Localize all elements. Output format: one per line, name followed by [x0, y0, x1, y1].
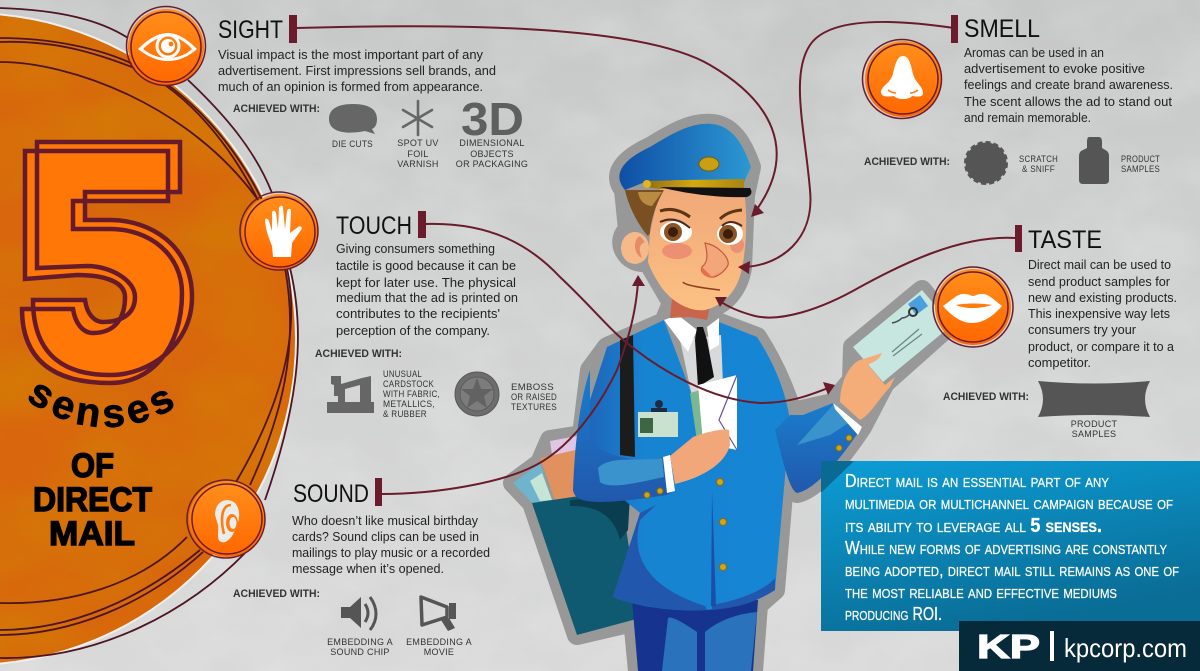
label: product samples: PRODUCT	[1121, 154, 1160, 164]
label: unusual cardstock: WITH FABRIC,	[383, 389, 440, 399]
panel: smell	[864, 15, 1173, 184]
title: of direct mail	[33, 447, 152, 553]
label: scratch and sniff: SCRATCH	[1019, 154, 1058, 164]
body text: new and existing products.	[1028, 291, 1177, 305]
heading bar	[951, 15, 958, 43]
body text: advertisement to evoke positive	[964, 62, 1145, 76]
icon: nose	[862, 40, 942, 118]
footer logo: KP	[977, 628, 1040, 665]
label: product samples: SAMPLES	[1121, 164, 1160, 174]
body text: send product samples for	[1028, 275, 1170, 289]
title numeral 5	[22, 142, 192, 383]
callout text: its ability to leverage all 5 senses.	[845, 515, 1102, 537]
envelope in hand	[690, 375, 737, 450]
connector: sound to ear	[382, 275, 645, 494]
footer logo: kpcorp.com	[1064, 633, 1187, 663]
icon: sample swatch	[1038, 381, 1150, 417]
neck	[670, 298, 710, 320]
body text	[218, 48, 496, 94]
title: of direct mail: DIRECT	[33, 481, 152, 519]
achieved with: ACHIEVED WITH:	[943, 391, 1029, 403]
label: spot uv	[397, 138, 439, 169]
icon: embossed star	[455, 372, 499, 416]
callout text: the most reliable and effective mediums	[845, 582, 1117, 602]
body text: contributes to the recipients'	[336, 307, 500, 321]
achieved with: ACHIEVED WITH:	[233, 103, 320, 115]
callout text	[845, 471, 1179, 624]
title word: senses	[28, 384, 174, 428]
body text: cards? Sound clips can be used in	[292, 530, 479, 544]
label: emboss: TEXTURES	[511, 402, 557, 412]
label: dimensional: OR PACKAGING	[456, 159, 528, 169]
connector: smell to nose	[738, 22, 954, 274]
head	[621, 188, 746, 310]
label: movie: MOVIE	[424, 647, 454, 657]
body text: The scent allows the ad to stand out	[964, 95, 1173, 109]
body text: product, or compare it to a	[1028, 340, 1174, 354]
body text: mailings to play music or a recorded	[292, 546, 490, 560]
left hand	[670, 429, 730, 484]
label: spot uv: SPOT UV	[397, 138, 439, 148]
panel: sight	[218, 15, 528, 169]
label: sound chip: SOUND CHIP	[330, 647, 390, 657]
icon: ear	[187, 480, 265, 558]
icon: 3D: 3D	[461, 93, 524, 145]
label: unusual cardstock: METALLICS,	[383, 399, 435, 409]
body text: message when it’s opened.	[292, 562, 444, 576]
label: sound chip	[327, 637, 393, 657]
right hand	[840, 353, 895, 420]
label: unusual cardstock: UNUSUAL	[383, 369, 422, 379]
body text: Direct mail can be used to	[1028, 258, 1171, 272]
body text: This inexpensive way lets	[1028, 307, 1170, 321]
label: sound chip: EMBEDDING A	[327, 637, 393, 647]
icon: sewing machine	[327, 376, 374, 413]
icon: eye	[126, 6, 206, 86]
title: of direct mail: OF	[71, 447, 114, 485]
label: movie: EMBEDDING A	[406, 637, 472, 647]
achieved with: ACHIEVED WITH:	[233, 588, 320, 600]
body text: and remain memorable.	[964, 111, 1091, 125]
body text: kept for later use. The physical	[336, 276, 516, 290]
icon: scratch badge	[966, 142, 1006, 184]
body text: competitor.	[1028, 356, 1091, 370]
body text: Giving consumers something	[336, 242, 495, 256]
title word: senses: senses	[28, 384, 174, 428]
label: scratch and sniff	[1019, 154, 1058, 174]
label: spot uv: VARNISH	[397, 159, 439, 169]
body text	[336, 242, 518, 338]
achieved with: ACHIEVED WITH:	[864, 156, 950, 168]
label: emboss: EMBOSS	[511, 382, 554, 392]
label: dimensional: DIMENSIONAL	[459, 138, 525, 148]
trousers	[632, 600, 758, 671]
connector: sight to eye	[296, 26, 777, 217]
label: product samples: SAMPLES	[1072, 429, 1116, 439]
label: dimensional	[456, 138, 528, 169]
heading bar	[1015, 225, 1022, 252]
body text: advertisement. First impressions sell brands, and	[218, 64, 496, 78]
label: spot uv: FOIL	[407, 149, 429, 159]
icon: die cut	[329, 104, 377, 134]
mailman halo silhouette	[513, 124, 950, 671]
body text	[964, 46, 1173, 125]
mail cap	[619, 124, 751, 197]
icon: spot uv	[403, 101, 432, 135]
callout text: Direct mail is an essential part of any	[845, 471, 1109, 491]
body text: feelings and create brand awareness.	[964, 78, 1173, 92]
icon: speaker	[341, 597, 376, 630]
label: emboss: OR RAISED	[511, 392, 557, 402]
heading bar	[289, 15, 297, 43]
body text: medium that the ad is printed on	[336, 291, 518, 305]
label: unusual cardstock: & RUBBER	[383, 409, 427, 419]
mailman illustration	[513, 124, 952, 671]
label: die cuts: DIE CUTS	[332, 139, 373, 149]
shirt and collar	[664, 315, 724, 410]
letter in hand	[853, 290, 952, 382]
footer logo	[959, 621, 1200, 671]
icon: bottle	[1079, 137, 1109, 184]
callout text: producing ROI.	[845, 604, 942, 624]
body text: tactile is good because it can be	[336, 259, 516, 273]
body text: much of an opinion is formed from appearance.	[218, 80, 483, 94]
body text: perception of the company.	[336, 324, 490, 338]
heading: sound: SOUND	[293, 480, 369, 508]
title: of direct mail: MAIL	[49, 515, 135, 553]
achieved with: ACHIEVED WITH:	[315, 348, 402, 360]
panel: touch	[315, 211, 557, 419]
left sleeve	[573, 370, 675, 502]
heading: touch: TOUCH	[336, 212, 412, 240]
panel: sound	[233, 478, 490, 657]
label: unusual cardstock	[383, 369, 440, 419]
id badge	[638, 400, 678, 437]
bag	[513, 435, 640, 635]
heading: smell: SMELL	[964, 15, 1040, 43]
connector: touch to hand	[425, 224, 835, 403]
body text: consumers try your	[1028, 323, 1136, 337]
body text: Visual impact is the most important part of any	[218, 48, 484, 62]
necktie	[695, 327, 714, 387]
heading: taste: TASTE	[1028, 226, 1102, 254]
label: emboss	[511, 382, 557, 412]
callout panel	[821, 461, 1200, 631]
heading bar	[418, 211, 426, 238]
label: unusual cardstock: CARDSTOCK	[383, 379, 434, 389]
label: product samples: PRODUCT	[1071, 419, 1117, 429]
label: product samples	[1121, 154, 1160, 174]
label: scratch and sniff: & SNIFF	[1022, 164, 1055, 174]
heading bar	[375, 478, 382, 506]
jacket shadow and seam	[613, 490, 775, 610]
heading: sight: SIGHT	[218, 16, 283, 44]
body text	[292, 514, 490, 576]
body text: Who doesn’t like musical birthday	[292, 514, 479, 528]
body text	[1028, 258, 1177, 370]
buttons	[644, 435, 852, 570]
jacket	[583, 320, 790, 610]
label: movie	[406, 637, 472, 657]
label: product samples	[1071, 419, 1117, 439]
icon: hand	[240, 192, 318, 270]
right sleeve	[775, 403, 862, 493]
icon: lips	[933, 267, 1013, 347]
body text: Aromas can be used in an	[964, 46, 1104, 60]
icon: megaphone	[421, 597, 456, 631]
panel: taste	[943, 225, 1177, 439]
label: dimensional: OBJECTS	[470, 149, 514, 159]
connector: taste to mouth	[715, 238, 1015, 318]
big orange circle with rings	[0, 0, 300, 671]
shoulder strap	[620, 335, 635, 457]
